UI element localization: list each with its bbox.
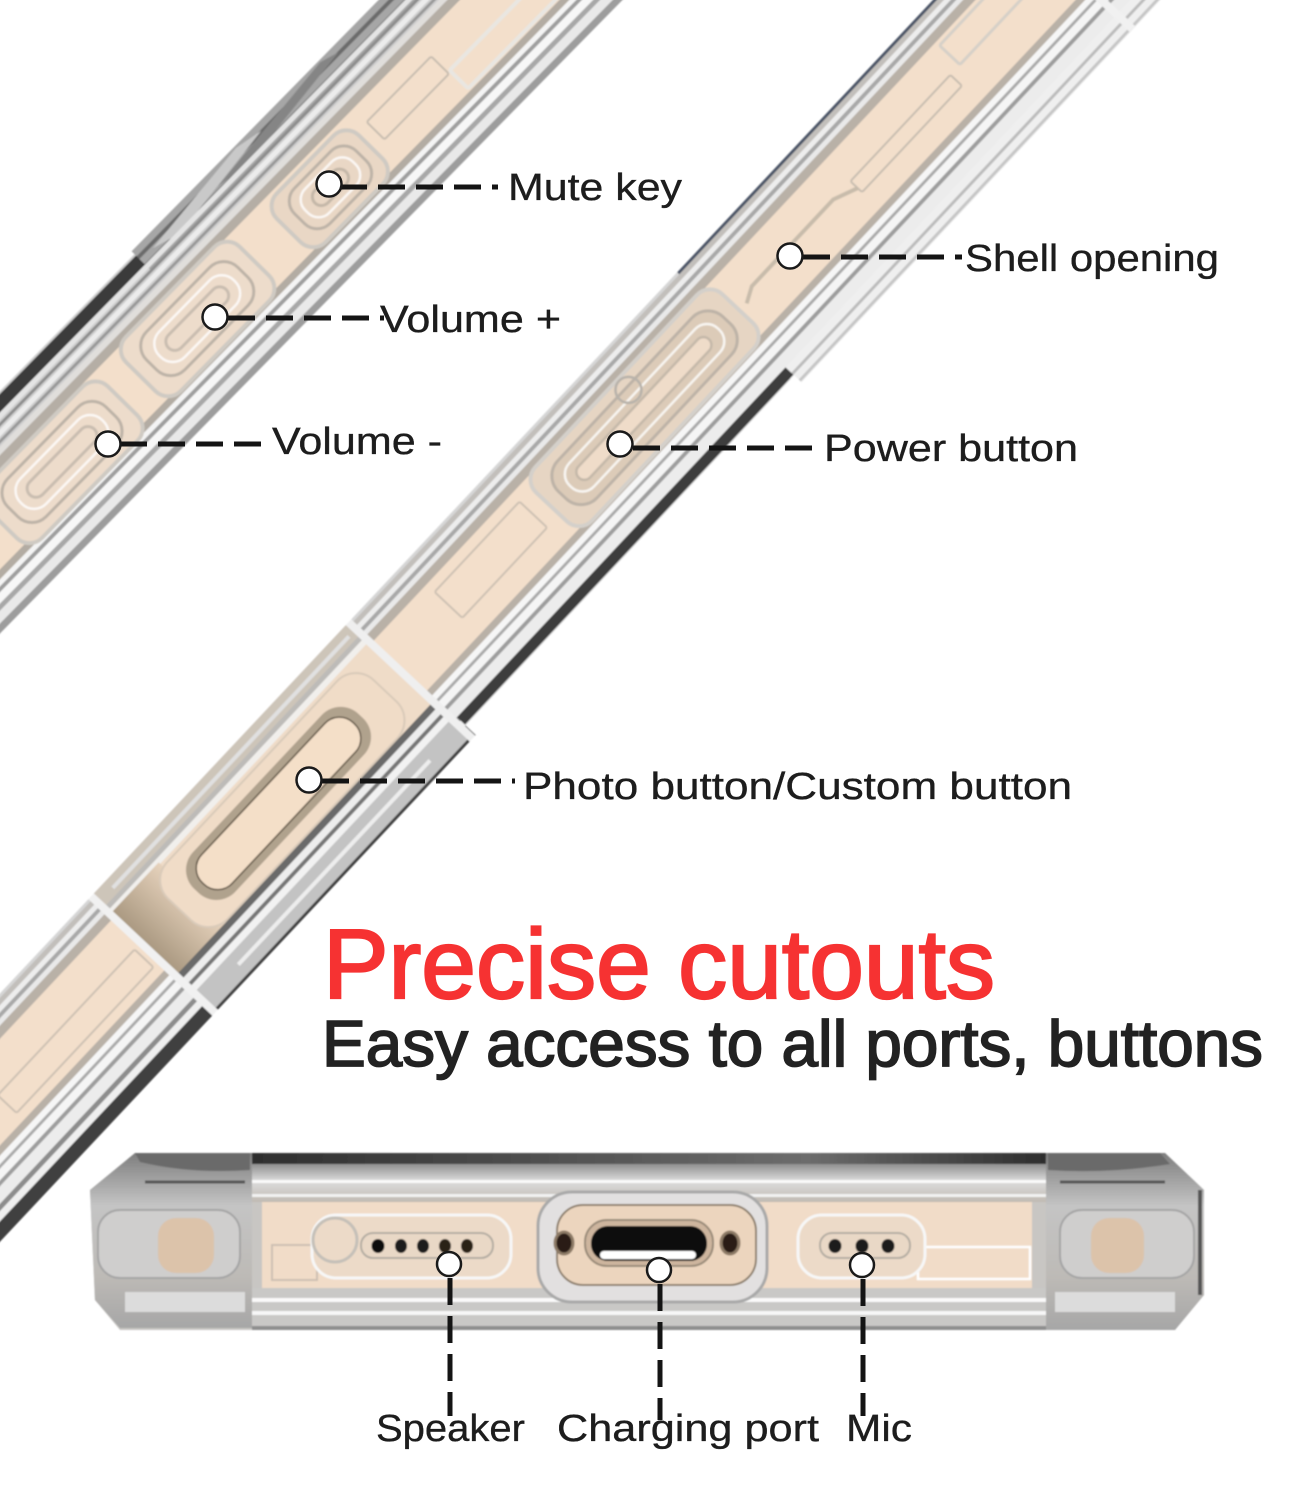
- callout: mic: Mic: [846, 1408, 912, 1450]
- title: Precise cutouts: [323, 909, 995, 1019]
- panel: upper phone case side strip: [0, 0, 877, 739]
- callout: power button: Power button: [824, 428, 1078, 470]
- left corner: [90, 1153, 252, 1328]
- callout: volume up: [202, 299, 561, 341]
- icon: speaker holes: [312, 1215, 511, 1278]
- panel: lower phone case side strip: [0, 0, 1172, 1315]
- callout: charging port: [557, 1258, 819, 1450]
- callout: mic: [846, 1253, 912, 1450]
- icon: volume up cutout: [113, 234, 282, 404]
- callout: speaker: [376, 1252, 525, 1450]
- right corner: [1046, 1153, 1204, 1330]
- callout: photo button: Photo button/Custom button: [523, 766, 1072, 808]
- decorative separators: [88, 0, 1139, 1016]
- callout: photo button: [296, 766, 1072, 808]
- icon: charging port: [538, 1192, 767, 1302]
- panel: phone case bottom view: [90, 1153, 1204, 1330]
- callout: power button: [608, 428, 1078, 470]
- icon: power button cutout: [523, 282, 766, 534]
- callout: volume down: [96, 421, 442, 463]
- callout: volume down: Volume -: [272, 421, 442, 463]
- callout: volume up: Volume +: [380, 299, 561, 341]
- icon: shell opening marker line: [741, 181, 858, 305]
- callout: shell opening: [778, 238, 1219, 280]
- callout: mute key: Mute key: [508, 167, 682, 209]
- icon: volume down cutout: [0, 374, 150, 551]
- callout: mute key: [316, 167, 682, 209]
- callout: charging port: Charging port: [557, 1408, 819, 1450]
- panel: photo button section: [92, 622, 470, 1010]
- icon: mic holes: [798, 1215, 925, 1278]
- callout: speaker: Speaker: [376, 1408, 525, 1450]
- icon: mute key cutout: [264, 123, 395, 255]
- subtitle: Easy access to all ports, buttons: [322, 1007, 1263, 1080]
- callout: shell opening: Shell opening: [965, 238, 1219, 280]
